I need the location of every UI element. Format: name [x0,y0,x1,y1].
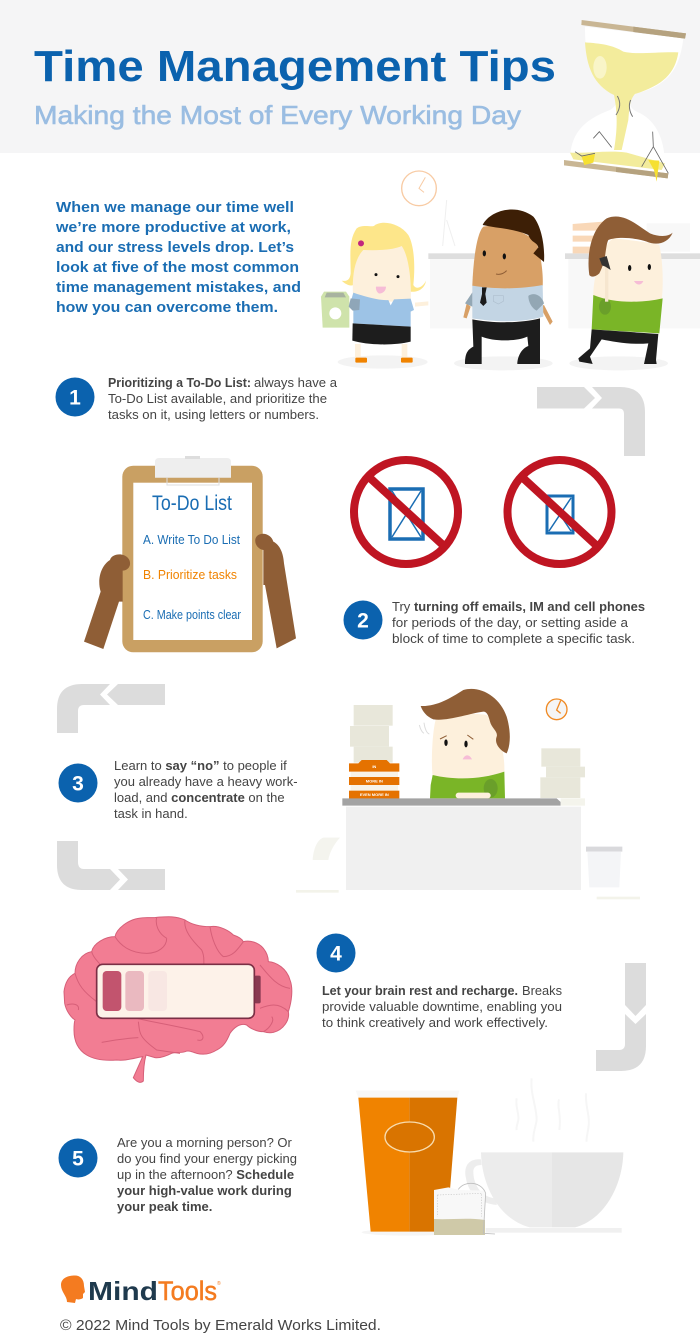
illustration: coffee cup and tea [356,1078,623,1236]
arrow: step 3 bottom [57,841,165,890]
waste bin and floor paper [296,838,640,899]
step 5 text: Are you a morning person? Or [117,1135,293,1150]
step 1 text: tasks on it, using letters or numbers. [108,407,319,422]
step 5 text: Schedule [236,1167,294,1182]
icon: no email sign 1 [354,460,458,564]
brain [64,917,292,1082]
intro text: When we manage our time well [56,199,294,216]
worried worker [419,689,510,798]
coffee cup [356,1091,459,1236]
icon: no email sign 2 [508,460,612,564]
step 2 badge: 2 [357,610,369,632]
to-do heading: To-Do List [152,492,232,515]
title: Time Management Tips [34,42,556,91]
wall clock [402,171,436,206]
icon: orange head [61,1276,85,1303]
intro text: we’re more productive at work, [55,219,291,236]
step 2 text: for periods of the day, or setting aside a [392,615,629,630]
logo: MindTools [61,1276,221,1306]
background desks [428,200,700,328]
step 4 text: to think creatively and work effectively. [322,1015,548,1030]
intro text: and our stress levels drop. Let’s [56,239,294,256]
arrow: top right [537,387,645,456]
logo: MindTools: ® [217,1280,221,1287]
step 1 badge: 1 [69,386,81,410]
logo: MindTools: Tools [158,1276,217,1306]
desk [342,798,585,890]
step 5 text: your peak time. [117,1199,212,1214]
logo: MindTools: Mind [88,1276,158,1306]
step 5 text: up in the afternoon? [117,1167,236,1182]
step 2 text [392,599,645,646]
step 5 text: your high-value work during [117,1183,292,1198]
step 4 text [322,983,562,1030]
step 4 badge [316,934,356,972]
illustration: overloaded worker at desk [296,689,640,899]
steam [516,1078,589,1142]
in trays: IN [372,764,376,769]
item B: B. Prioritize tasks [143,568,237,582]
tea bag [434,1183,495,1235]
step 4 text: provide valuable downtime, enabling you [322,999,562,1014]
copyright: © 2022 Mind Tools by Emerald Works Limited. [60,1317,381,1334]
step 2 text: block of time to complete a specific task. [392,631,635,646]
intro text: look at five of the most common [56,259,299,276]
hands holding clipboard [84,534,296,649]
header band [0,0,700,153]
brain folds [67,917,290,1053]
arrow: step 4 [596,963,646,1071]
paper stacks [350,705,585,798]
illustration: brain with low battery [64,917,292,1082]
item C: C. Make points clear [143,608,241,622]
intro text: how you can overcome them. [56,299,278,316]
step 3 text: you already have a heavy work- [114,774,298,789]
step 4 text: Breaks [522,983,562,998]
in trays: EVEN MORE IN [360,792,389,797]
subtitle: Making the Most of Every Working Day [34,100,521,130]
step 3 text: concentrate on the [171,790,285,805]
step 3 badge: 3 [72,772,84,796]
step 3 text: load, and [114,790,171,805]
step 4 badge: 4 [330,942,342,966]
step 3 text: Learn to [114,758,165,773]
character: man in blue shirt and tie [454,209,553,370]
tea cup [465,1152,623,1233]
item A: A. Write To Do List [143,533,240,547]
in trays [349,760,399,799]
character: man on phone in green shirt [569,217,673,370]
step 1 badge [56,378,94,416]
step 2 text: turning off emails, IM and cell phones [414,599,645,614]
step 2 text: Try [392,599,411,614]
step 3 badge [58,764,98,802]
icon: breaking hourglass [564,20,686,182]
step 5 badge: 5 [72,1148,84,1170]
intro text: time management mistakes, and [56,279,301,296]
step 5 badge [58,1138,98,1178]
step 3 text: task in hand. [114,806,188,821]
character: woman with recycling bin [321,223,428,369]
step 2 badge [344,600,382,640]
step 3 text: say “no” to people if [165,758,287,773]
orange clock [546,699,567,720]
step 1 text: Prioritizing a To-Do List: [108,375,251,390]
step 1 text: always have a [254,375,338,390]
intro text [55,199,301,316]
step 4 text: Let your brain rest and recharge. [322,983,518,998]
step 1 text: To-Do List available, and prioritize the [108,391,327,406]
step 5 text: do you find your energy picking [117,1151,297,1166]
illustration: clipboard to-do list [84,456,296,652]
low battery [97,964,261,1018]
illustration: three office workers [321,171,700,370]
step 1 text [108,375,338,422]
arrow: step 3 top [57,684,165,733]
in trays: MORE IN [366,778,383,783]
